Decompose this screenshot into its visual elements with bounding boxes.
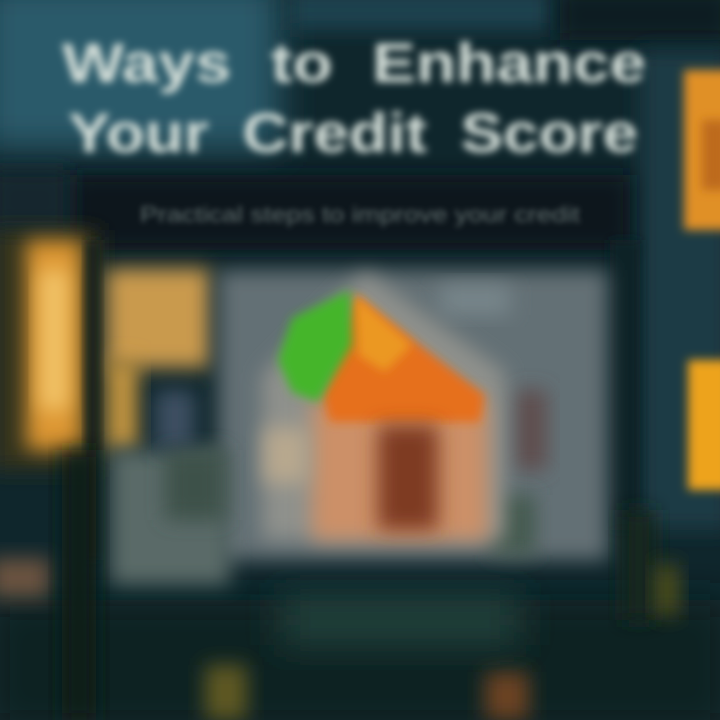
orange roof [322, 295, 485, 422]
title [62, 31, 646, 164]
door [378, 425, 438, 530]
foliage [62, 450, 679, 720]
title: Ways to Enhance [62, 31, 646, 94]
green gauge segment [278, 290, 352, 402]
left annex [264, 428, 308, 483]
house outline [262, 272, 505, 540]
title: Your Credit Score [68, 101, 638, 164]
icon: house with credit gauge [262, 272, 505, 540]
panel: central grey building [110, 270, 608, 585]
house body [312, 400, 488, 540]
subtitle: Practical steps to improve your credit [140, 202, 580, 227]
panel: right lit windows [684, 70, 720, 490]
panel: left lit windows [0, 240, 210, 598]
